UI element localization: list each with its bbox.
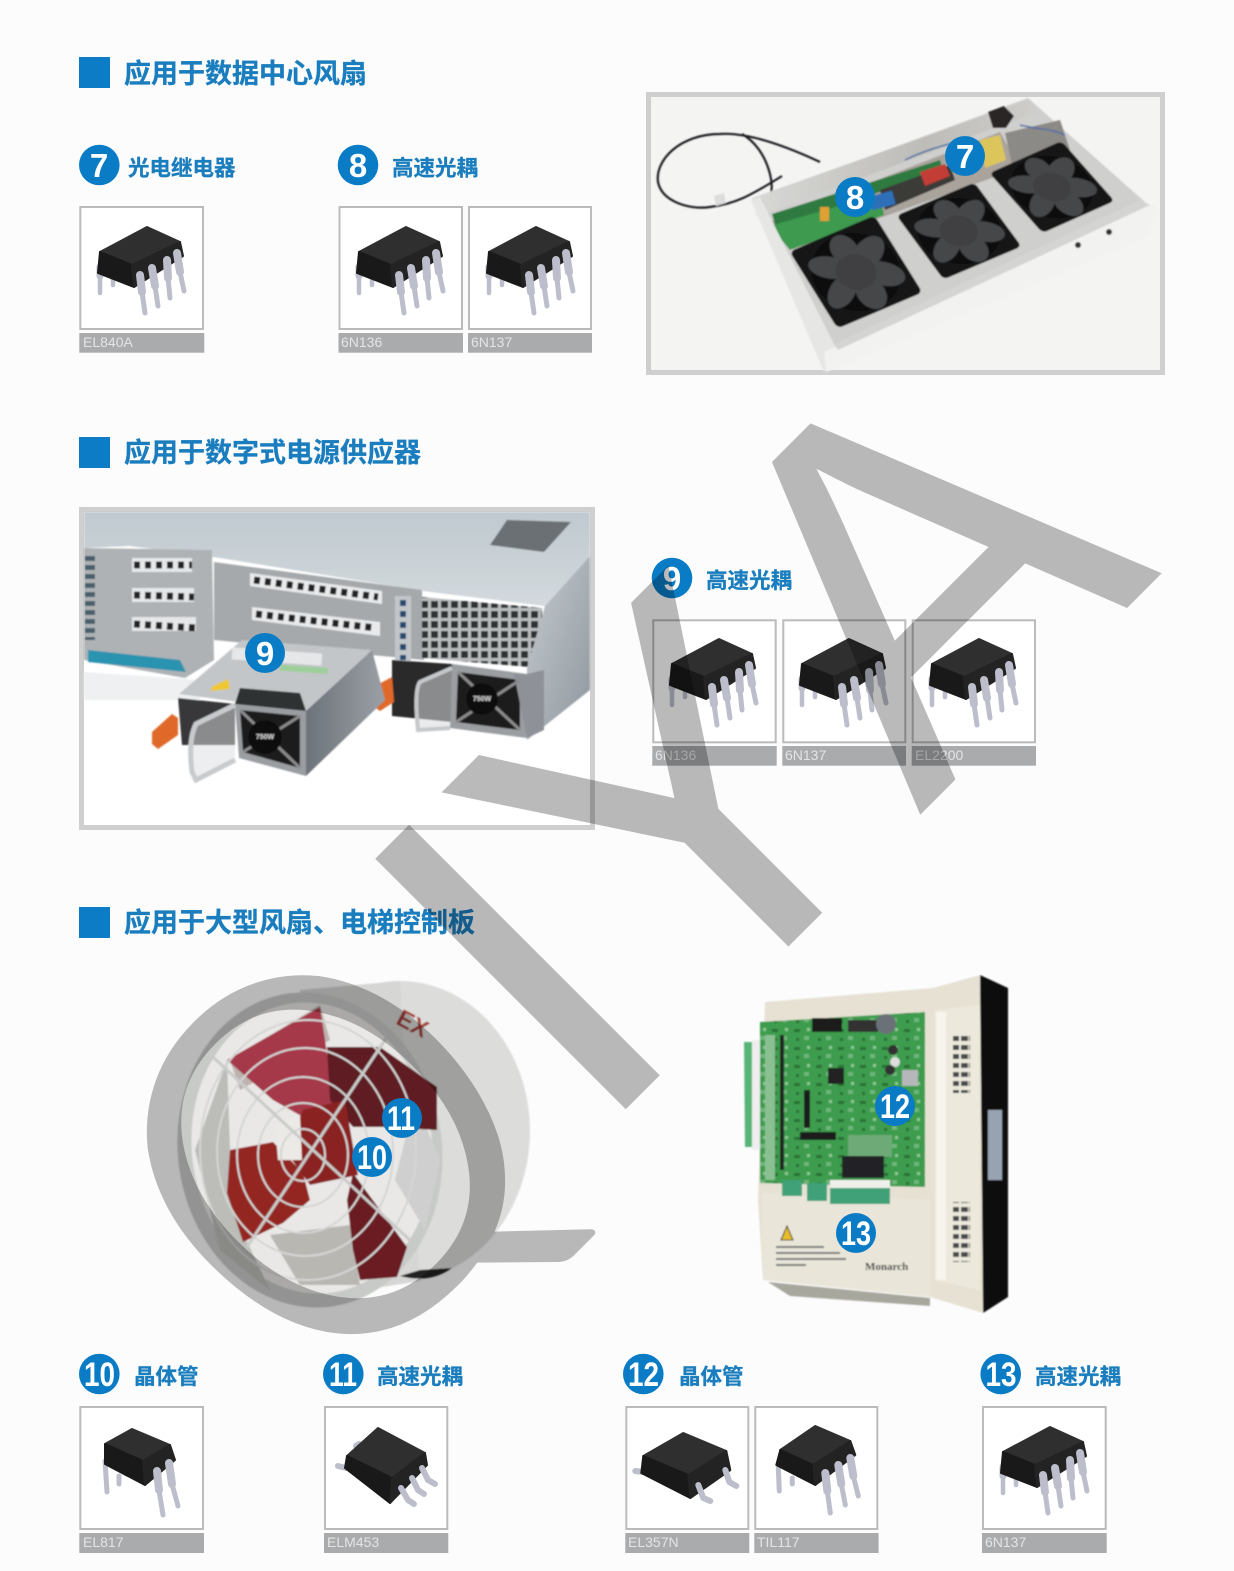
badge 11 on photo: 11 — [387, 1100, 415, 1138]
item 10: transistor output — [79, 1354, 204, 1553]
badge 10 on photo: 10 — [357, 1139, 387, 1177]
item 13: high speed optocoupler: 13 — [986, 1356, 1016, 1394]
item 11: high speed optocoupler: 高速光耦 — [377, 1364, 463, 1389]
item 13: high speed optocoupler: 高速光耦 — [1035, 1364, 1121, 1389]
badge 7 on photo: 7 — [956, 138, 974, 175]
section 1: data center fans — [79, 57, 1162, 372]
photo: elevator control unit — [744, 975, 1008, 1313]
item 7: photo relay — [79, 145, 236, 353]
badge 12 on photo: 12 — [880, 1088, 910, 1126]
watermark: QIYA: IYA — [263, 242, 1234, 1221]
badge 8 on photo — [835, 177, 875, 217]
EX mark: EX — [392, 1005, 433, 1044]
item 12: transistor output: 12 — [628, 1356, 659, 1394]
item 8: high speed optocouplers: 6N136 — [341, 334, 382, 350]
item 9: high speed optocouplers — [652, 558, 1036, 766]
item 7: photo relay: 7 — [90, 147, 108, 184]
watermark: QIYA: Q — [23, 853, 638, 1468]
item 9: high speed optocouplers: 6N137 — [785, 747, 826, 763]
item 10: transistor output: 晶体管 — [134, 1365, 199, 1389]
cable — [658, 134, 820, 208]
item 11: high speed optocoupler — [323, 1354, 463, 1553]
badge 8 on photo: 8 — [846, 179, 864, 216]
item 11: high speed optocoupler: ELM453 — [327, 1534, 379, 1550]
item 8: high speed optocouplers: 高速光耦 — [392, 156, 478, 180]
item 10: transistor output: EL817 — [83, 1534, 124, 1550]
badge 13 on photo: 13 — [841, 1215, 871, 1253]
item 11: high speed optocoupler: 11 — [329, 1356, 357, 1394]
heading marker and title: large fans and elevator boards: 应用于大型风扇、电梯控制板 — [124, 908, 475, 938]
item 13: high speed optocoupler: 6N137 — [985, 1534, 1026, 1550]
item 12: transistor output: 晶体管 — [679, 1365, 744, 1389]
item 9: high speed optocouplers: EL2200 — [915, 747, 963, 763]
item 7: photo relay: 光电继电器 — [128, 156, 236, 180]
photo: fan tray chassis — [648, 94, 1162, 372]
item 8: high speed optocouplers: 6N137 — [471, 334, 512, 350]
badge 9 on photo — [245, 633, 285, 673]
badge 7 on photo — [945, 136, 985, 176]
item 7: photo relay: EL840A — [83, 334, 133, 350]
heading marker and title: digital power supply: 应用于数字式电源供应器 — [124, 438, 421, 468]
item 12: transistor output — [623, 1354, 879, 1553]
brand text: Monarch — [865, 1261, 908, 1273]
item 12: transistor output: TIL117 — [757, 1534, 800, 1550]
item 9: high speed optocouplers: 高速光耦 — [706, 568, 792, 593]
item 9: high speed optocouplers: 9 — [663, 560, 681, 597]
photo: server power supplies: 750W — [256, 734, 275, 741]
item 13: high speed optocoupler — [980, 1354, 1121, 1553]
section 3: large fans and elevator boards — [79, 907, 1121, 1553]
photo: server power supplies: 750W — [473, 696, 492, 703]
photo: industrial axial fan — [157, 975, 530, 1325]
left supply — [179, 640, 372, 711]
item 12: transistor output: EL357N — [628, 1534, 679, 1550]
heading marker and title: data center fans: 应用于数据中心风扇 — [124, 59, 367, 89]
item 8: high speed optocouplers: 8 — [349, 147, 367, 184]
photo: server power supplies — [82, 510, 592, 828]
section 2: digital power supply — [79, 437, 1036, 828]
item 10: transistor output: 10 — [84, 1356, 115, 1394]
item 8: high speed optocouplers — [338, 145, 592, 353]
badge 9 on photo: 9 — [256, 635, 274, 672]
item 9: high speed optocouplers: 6N136 — [655, 747, 696, 763]
right supply — [392, 660, 452, 722]
